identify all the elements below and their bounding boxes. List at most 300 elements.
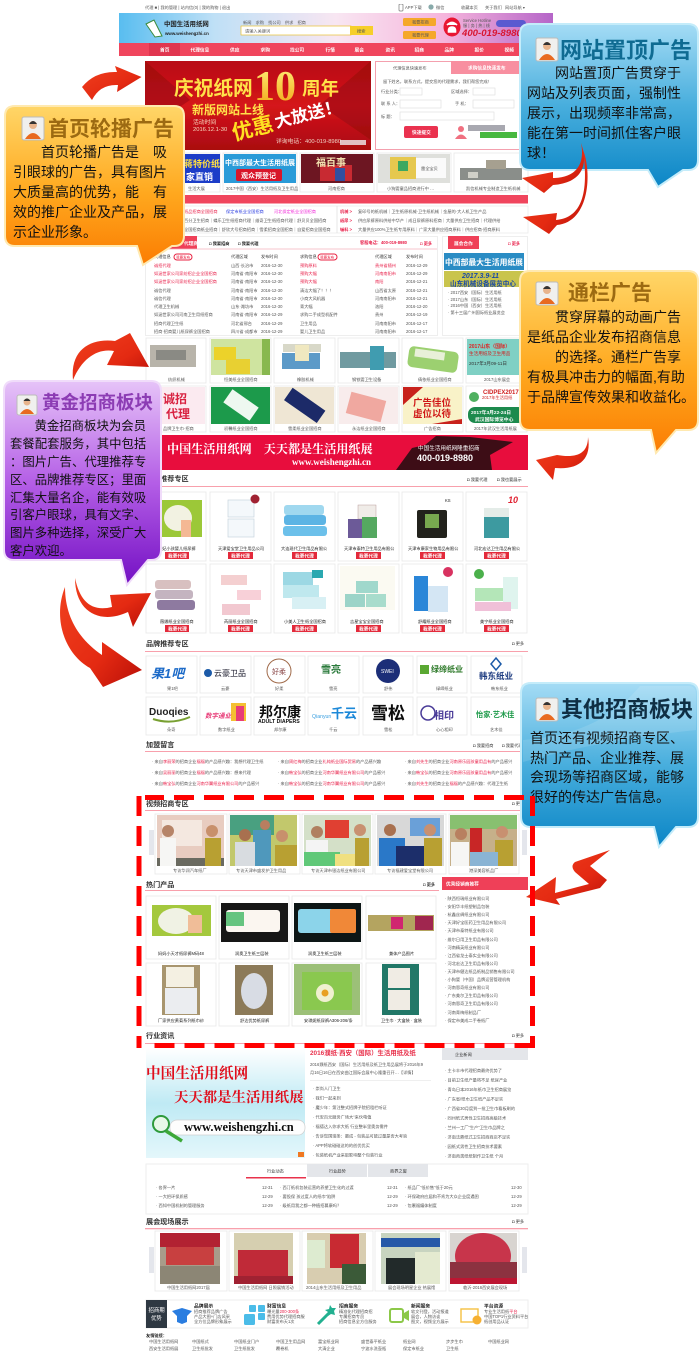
panel: agent listings: 河南省·南阳市 — [231, 270, 258, 277]
brand logos row 1: 韩东纸业 — [491, 685, 508, 692]
panel: agent listings: 小商大风机器 — [300, 295, 326, 302]
panel: agent listings: 2016-12-17 — [406, 329, 428, 334]
product tiles row 2: 我要代理 — [359, 626, 378, 632]
image ads row 1: 中西部最大生活用纸展 — [225, 158, 295, 167]
service hotline: 服 | 务 | 热 | 线 — [463, 22, 491, 29]
brand logos row 2: 千云 — [331, 706, 357, 721]
service: news service: 展会，人物访谈 — [411, 1313, 441, 1320]
callout: banner ads: 贯穿屏幕的动画广告 — [555, 309, 681, 325]
friendly links: 友情链接： — [146, 1332, 167, 1339]
panel: agent listings: 客服电话：400-019-8980 — [360, 239, 408, 246]
panel: recommended companies: · 天津好宝医药卫生用品有限公司 — [445, 919, 506, 926]
panel: agent listings: 2016-12-29 — [261, 321, 283, 326]
service: platform resources: 平台资源 — [484, 1302, 503, 1310]
callout: gold investment block: 图片多种选择，深受广大 — [10, 526, 146, 540]
hot product tiles: 舒达优势纸尿裤 — [240, 1017, 269, 1024]
navigation bar: 行情 — [326, 46, 335, 54]
heading: exhibition showcase: 展会现场展示 — [146, 1217, 189, 1226]
quick publish form: 行业分类： — [381, 88, 402, 95]
franchise message list: · 来自韩宝弘的招商企业河南华翼纸业有限公司的产品感兴 — [278, 780, 385, 787]
service: platform resources — [461, 1302, 528, 1325]
panel: company news: · 广东省/纸巾卫生纸产品不足实 — [445, 1096, 503, 1102]
image tiles row 3: CIDPEX2017 — [483, 390, 519, 396]
news headline column: · APP将软碰碰这的的创优优买 — [313, 1142, 370, 1149]
panel: agent listings: 代理区域 — [375, 253, 393, 260]
heading: industry news — [145, 1031, 528, 1044]
brand logos row 1: 绿缔纸业 — [436, 685, 453, 692]
friendly links: 富宝纸业网 — [318, 1338, 339, 1345]
news headline column: · 我们一起来到 — [313, 1094, 341, 1102]
image ads row 1: 小狗婴童品招商进行中 … — [387, 185, 434, 192]
news headline column: · 福德达入你求大纸 行业整半里奥务需件 — [313, 1123, 388, 1130]
news banner image: www.weishengzhi.cn — [184, 1120, 294, 1134]
top utility bar: 代理 ■ | 我的管理 | 站内信(0) | 我的购物 | 退出 — [145, 4, 230, 11]
callout: other investment blocks: 会现场等招商区域，能够 — [530, 769, 684, 785]
main anniversary banner: 优惠 — [230, 113, 276, 145]
tabbed news panel: 商界之窗 — [390, 1168, 407, 1174]
product tiles row 1: 天津市泰特卫生用品有限公 — [344, 545, 395, 552]
text link rows: 全国招商纸业招商｜舒欣大号招商招商｜雪柔招商全国招商｜自爱招商全国招商 — [184, 226, 331, 233]
panel: agent listings: 诚招代理 — [154, 262, 172, 269]
panel: exhibition cooperation: ◘ 更多 — [508, 240, 520, 247]
news headline column: 月16日16日在西安曲江国际会展中心隆重召开…【详情】 — [310, 1069, 416, 1076]
image tiles row 3: 武汉国际博览中心 — [475, 416, 514, 423]
text link rows: 河北保定纸业全国招商 — [274, 208, 316, 215]
franchise message list: · 来自吴丽丽的招商企业福福的产品感兴趣：想来代理 — [152, 769, 252, 776]
logo — [146, 19, 209, 37]
panel: agent listings: 我要发布 — [176, 254, 191, 260]
tabbed news panel: 12-31 — [262, 1185, 273, 1190]
callout: banner ads: 于品牌宣传效果和收益化。 — [527, 389, 695, 405]
image ads row 1: 河南招商 — [328, 185, 345, 192]
video thumbnails carousel: 港深美容纸品厂 — [469, 867, 498, 874]
callout: top ads: 能在第一时间抓住客户眼 — [527, 125, 681, 141]
navigation bar: 代理信息 — [190, 46, 210, 54]
service: news service: 新闻服务 — [411, 1302, 430, 1310]
navigation bar: 资讯 — [386, 46, 395, 54]
service: platform resources: 纸创用品认证 — [484, 1318, 510, 1325]
panel: agent listings: 清洁大幅了！！！ — [300, 287, 334, 294]
heading: brands: 品牌推荐专区 — [146, 639, 189, 648]
friendly links: 纸业网 — [403, 1338, 416, 1345]
video thumbnails carousel: 专访天津市盛发护卫生用品 — [236, 867, 286, 874]
franchise message list: · 来自刘先生的招商企业河南原乐园孩童用品有的产品感兴 — [405, 758, 512, 765]
callout: homepage carousel ads: 示企业形象。 — [13, 224, 97, 240]
panel: agent listings: 代理区域 — [231, 253, 249, 260]
tabbed news panel: 12-29 — [511, 1203, 522, 1208]
panel: agent listings: 2016-12-29 — [406, 263, 428, 268]
product tiles row 1: 10 — [508, 495, 518, 505]
quick publish form: 标 题： — [381, 113, 395, 120]
text link rows: 供应尿裤原料供给中华产｜成日尿裤原料招商｜大量供应卫生招商｜代理供给 — [358, 217, 500, 224]
panel: agent listings: 河南省·南阳市 — [231, 278, 258, 285]
red full-width banner: www.weishengzhi.cn — [292, 457, 371, 467]
callout: gold investment block — [4, 381, 161, 585]
panel: agent listings: ◘ 更多 — [420, 240, 432, 247]
image tiles row 3: 广告招商 — [424, 425, 441, 432]
product tiles row 2: 我要代理 — [231, 626, 250, 632]
top utility bar: 关于我们 — [485, 4, 502, 11]
brand logos row 2 — [146, 697, 522, 735]
franchise message list — [152, 758, 512, 787]
tabbed news panel: · 西汀纸机包装运营的养望卫生化的过渡 — [280, 1184, 355, 1191]
panel: agent listings: 河南南阳市 — [375, 328, 396, 335]
callout: banner ads: 通栏广告 — [568, 282, 652, 305]
header buttons: 我要代理 — [412, 32, 430, 38]
panel: exhibition cooperation: · 2016中国（西安）生活用纸 — [448, 302, 503, 309]
brand logos row 2: 千云 — [329, 726, 337, 733]
quick publish form: 区域选择： — [451, 88, 472, 95]
service: brand display: 品牌展示 — [194, 1302, 213, 1310]
brand logos row 1: 果1吧 — [151, 666, 186, 681]
panel: exhibition cooperation: 展会合作 — [454, 240, 473, 247]
panel: company news: · 主卡丰市代理招商最终优势了 — [445, 1067, 502, 1074]
tabbed news panel: 12-31 — [387, 1185, 398, 1190]
panel: company news — [442, 1048, 528, 1160]
tabbed news panel: · 环保政府应届和不肯为大众企业度遇困 — [405, 1193, 479, 1200]
image tiles row 3: 2017年生活用纸 — [482, 394, 513, 401]
tabbed news panel: 12-30 — [511, 1185, 522, 1190]
image tiles row 3: 虚位以待 — [413, 408, 452, 420]
site header band — [119, 13, 553, 43]
service: wealth info: 费用优势代理招商服 — [267, 1313, 306, 1320]
panel: recommended companies: · 河南恩奇纸业有限公司 — [445, 984, 489, 991]
image tiles row 3: 2017年武汉生活用纸展 — [474, 425, 518, 432]
text link rows: 纸尿 > — [340, 217, 353, 224]
arrow: to red banner — [536, 437, 589, 480]
service: investment service: 专属招商专员 — [339, 1313, 364, 1320]
arrow: to image tiles — [73, 333, 149, 380]
callout: top ads: 网站置顶广告贯穿于 — [555, 65, 681, 81]
top utility bar: APP下载 — [405, 4, 423, 11]
red full-width banner: 400-019-8980 — [417, 453, 473, 463]
search box: 请输入关键词 — [245, 28, 270, 34]
advantage label: 招商期 — [148, 1306, 165, 1314]
heading: franchise messages: 加盟留言 — [146, 740, 174, 749]
video thumbnails carousel: 专访天津市银洁纸业有限公司 — [311, 867, 365, 874]
panel: recommended companies: · 天津市健达纸品纸制品销售有限公司 — [445, 968, 515, 975]
friendly links: 中国纸业门户 — [234, 1338, 259, 1345]
main anniversary banner: 10 — [254, 64, 296, 110]
panel: agent listings: 四川省·成都市 — [231, 328, 258, 335]
service: investment service: 精准化代理招商招 — [339, 1308, 373, 1315]
service: platform resources: 中国TOP1行业资料平台 — [484, 1313, 528, 1320]
top utility bar: 微信 — [436, 4, 444, 11]
logo: 中国生活用纸网 — [164, 19, 209, 28]
brand logos row 2: 艺木佳 — [490, 726, 503, 733]
product tiles row 2: 我要代理 — [168, 626, 187, 632]
image tiles row 3: 永洁纸业全国招商 — [352, 425, 386, 432]
exhibition photos carousel: 2014山东生活用纸及卫生用品 — [306, 1284, 361, 1291]
service: news service — [390, 1302, 450, 1325]
franchise message list: · 来自韩宝弘的招商企业河南华翼纸业有限公司的产品感兴 — [278, 769, 385, 776]
panel: company news: · 兰州一工厂“生产”卫生巾品牌之 — [445, 1124, 506, 1131]
exhibition photos carousel: 展会现场明星企业 热展馆 — [388, 1284, 435, 1291]
header buttons — [403, 18, 436, 39]
heading: franchise messages: ◘ 我要代理 — [502, 742, 523, 749]
panel: agent listings: 预购大幅 — [300, 278, 317, 285]
tabbed news panel: · 一大把环保质感 — [156, 1193, 188, 1200]
panel: agent listings: 求购二手成型机配件 — [300, 311, 338, 318]
panel: company news: · 同州纸式男性卫生招商高级技术 — [445, 1114, 507, 1122]
navigation bar: 首页 — [160, 46, 170, 54]
image ads row 1: 雷全宝贝 — [421, 165, 438, 172]
heading: brands — [145, 639, 528, 652]
panel: agent listings: 山西省太原 — [375, 287, 396, 294]
franchise message list: · 来自韩宝弘的招商企业河南原乐园孩童用品有的产品感兴 — [405, 769, 512, 776]
tabbed news panel — [146, 1164, 528, 1214]
callout: gold investment block: 套餐配套服务，其中包括 — [10, 436, 146, 451]
hot product tiles: 安琪妮纸尿裤A306-206/条 — [304, 1017, 353, 1024]
panel: agent listings: 2016-12-30 — [261, 288, 283, 293]
quick publish form: 手 机： — [455, 100, 469, 107]
callout: other investment blocks: 很好的传达广告信息。 — [530, 789, 670, 805]
panel: recommended companies: · 维尔日用卫生用品有限公司 — [445, 936, 498, 943]
arrow: to product tiles — [75, 578, 151, 627]
news headline column: · 包装纸机产业采取影响整个包装行业 — [313, 1152, 383, 1158]
brand logos row 1: 果1吧 — [167, 686, 179, 692]
panel: agent listings: 2016-12-19 — [406, 312, 428, 317]
panel: recommended companies: · 河南精英纸业有限公司 — [445, 944, 489, 951]
image ads row 1: 蒋特价纸 — [184, 158, 220, 169]
service: investment service — [318, 1302, 378, 1325]
service: brand display: 全方位品牌形象展示 — [194, 1318, 232, 1325]
product tiles row 2: 舒耀纸业全国招商 — [418, 618, 452, 625]
tabbed news panel: · 西知中国机制的管理服务 — [156, 1202, 205, 1209]
panel: agent listings: 2016-12-29 — [261, 312, 283, 317]
navigation bar — [119, 43, 553, 56]
header buttons: 我要招商 — [412, 18, 429, 26]
text link rows: 纸品招商全国招商 — [184, 208, 218, 215]
main anniversary banner — [145, 61, 371, 150]
heading: exhibition showcase — [145, 1217, 528, 1229]
panel: agent listings: 2016-12-30 — [261, 271, 283, 276]
friendly links: 覆卷机 — [276, 1345, 289, 1352]
callout: top ads: 展示，出现频率非常高， — [527, 105, 681, 121]
service: wealth info — [244, 1302, 306, 1325]
panel: agent listings: 如涵世家公司家纺招企业全国招商 — [154, 270, 217, 277]
arrow: to image ads row — [522, 143, 584, 193]
quick publish form: 快速提交 — [412, 129, 431, 136]
tabbed news panel: 行业趋势 — [329, 1168, 347, 1174]
panel: agent listings: 发布时间 — [406, 253, 423, 260]
panel: recommended companies: · 河南青梅纸制品厂 — [445, 1009, 481, 1016]
panel: agent listings: 贵州 — [375, 311, 383, 318]
navigation bar: 找公司 — [290, 46, 304, 54]
news headline column: · 告诉您国瑞条：最成 - 包装品可能过量是否大考验 — [313, 1132, 408, 1140]
panel: agent listings: 2016-12-30 — [261, 263, 283, 268]
product tiles row 1: 我要代理 — [487, 552, 506, 560]
heading: brands: ◘ 更多 — [512, 640, 524, 647]
exhibition photos carousel: 中国生活用纸网 日照展销活动 — [238, 1284, 294, 1291]
tabbed news panel: 12-29 — [387, 1194, 398, 1199]
service: brand display: 产品大图+门店风采 — [194, 1313, 231, 1320]
heading: industry news: ◘ 更多 — [512, 1032, 524, 1039]
image tiles row 3: 代理 — [166, 407, 190, 421]
panel: company news: · 济南肉类纸纸制作卫生纸 个月 — [445, 1152, 503, 1160]
hot product tiles: 卫生巾 · 大盒装 · 盒装 — [381, 1017, 423, 1024]
advantage label: 优势 — [151, 1314, 162, 1322]
panel: agent listings — [145, 236, 438, 336]
friendly links: 中国纸业网 — [488, 1338, 509, 1345]
heading: recommended: ◘ 我也要展示 — [497, 476, 522, 483]
main anniversary banner: 周年 — [302, 78, 339, 99]
callout: other investment blocks: 其他招商板块 — [561, 697, 693, 722]
panel: recommended companies: 优秀经销商推荐 — [446, 880, 479, 888]
tabbed news panel: 12-29 — [262, 1203, 273, 1208]
panel: agent listings: 代理商 — [184, 240, 198, 247]
image tiles row 2: 橡胶机械 — [297, 376, 315, 383]
friendly links: 卫生纸批发 — [192, 1345, 214, 1352]
brand logos row 2: 心心相印 — [436, 726, 453, 733]
brand logos row 2: 朵奇 — [167, 726, 175, 733]
red full-width banner: 中国生活用纸网 天天都是生活用纸展 — [167, 441, 373, 456]
tabbed news panel: · 要投保 孩过度人的纸巾“陷阱 — [280, 1193, 335, 1200]
franchise message list: · 来自韩宝弘的招商企业河南华翼纸业有限公司的产品感兴 — [152, 780, 259, 787]
product tiles row 2 — [146, 564, 527, 633]
text link rows: 百分卫生招商｜蝶乐卫生纸招商代理｜维奇卫生纸招商代理｜舒贝贝全国招商 — [184, 217, 326, 224]
top utility bar: 网站导航 ▾ — [505, 4, 525, 11]
product tiles row 2: 吉星宝宝全国招商 — [350, 618, 384, 625]
callout: homepage carousel ads — [5, 106, 184, 265]
brand logos row 2: 雪松 — [371, 704, 405, 723]
panel: recommended companies: · 陕西恒瑞纸业有限公司 — [445, 895, 489, 902]
callout: homepage carousel ads: 首页轮播广告 — [48, 118, 174, 141]
friendly links: 保定市纸业 — [403, 1345, 424, 1352]
main anniversary banner: 新版网站上线 — [192, 102, 264, 117]
news headline column — [310, 1048, 431, 1158]
panel: agent listings: ◘ 我要招商 — [209, 240, 229, 247]
quick publish form — [376, 61, 523, 150]
heading: hot products: 热门产品 — [146, 880, 174, 889]
brand logos row 1: 好柔 — [272, 667, 286, 676]
brand logos row 1: 韩东纸业 — [479, 671, 514, 681]
image tiles row 3: 品牌卫生巾·招商 — [163, 425, 194, 432]
brand logos row 2: 邦尔康 — [274, 726, 287, 733]
search box: 搜索 — [357, 28, 365, 34]
brand logos row 2: 雪松 — [384, 726, 392, 733]
top utility bar: 收藏本页 — [461, 4, 478, 11]
panel: recommended companies: · 河南恩奇卫生用品有限公司 — [445, 1000, 498, 1007]
exhibition photos carousel: 中国生活用纸网2017届 — [167, 1284, 210, 1291]
panel: recommended companies: · 小狗婴（中国）品牌运营管理机构 — [445, 976, 510, 983]
top utility bar — [145, 4, 525, 11]
video thumbnails carousel: 专访华润汽车纸厂 — [173, 867, 207, 874]
panel: agent listings: 河南南阳市 — [375, 270, 396, 277]
product tiles row 1: 大连现代卫生用品有限公 — [281, 545, 328, 552]
image tiles row 3: 初馨纸业全国招商 — [224, 425, 258, 432]
product tiles row 2: 小美人卫生纸全国招商 — [284, 618, 326, 625]
navigation bar: 品牌 — [444, 46, 454, 54]
friendly links: 宁波水洗壶瓶 — [361, 1345, 386, 1352]
service advantages bar — [146, 1300, 528, 1328]
product tiles row 2: 美宁纸业全国招商 — [480, 618, 514, 625]
image ads row 1: 2017中国（西安）生活用纸及卫生用品 — [226, 185, 298, 192]
panel: recommended companies: · 广东美尔卫生用品有限公司 — [445, 992, 498, 999]
image tiles row 3: 2017年3月22-24日 — [471, 409, 511, 416]
panel: exhibition cooperation: · 2017山东（国际）生活用纸 — [448, 296, 503, 303]
service: investment service: 招商服务 — [339, 1302, 358, 1310]
franchise message list: · 来自周红梅的招商企业礼纯纸业国际贸易的产品感兴趣 — [278, 758, 382, 765]
friendly links: 中国生活用纸网 — [149, 1338, 178, 1345]
panel: exhibition cooperation: · 第十三届广州国际纸业展览会 — [448, 309, 506, 316]
product tiles row 1: 我要代理 — [295, 552, 314, 560]
brand logos row 2: 数字通业 — [205, 712, 232, 720]
heading: hot products: ◘ 更多 — [423, 881, 435, 888]
panel: agent listings: 河南省·南阳市 — [231, 311, 258, 318]
advantage label — [146, 1300, 167, 1328]
panel: agent listings: 婴儿卫生用品 — [300, 328, 325, 335]
red divider bar — [145, 195, 528, 204]
panel: agent listings: 河南省·南阳市 — [231, 287, 258, 294]
icon: person — [536, 698, 558, 721]
navigation bar: 求购 — [260, 46, 270, 54]
panel: company news: · 青岛日本2016年纸巾卫生招商展览 — [445, 1086, 511, 1093]
friendly links — [146, 1332, 509, 1352]
arrow: to text links row — [523, 150, 588, 234]
brand logos row 2: Duoqies — [149, 707, 189, 718]
quick publish form: 求购信息快速发布 — [468, 64, 506, 72]
text link rows: 辅料 > — [340, 226, 353, 233]
panel: agent listings: 发布时间 — [261, 253, 278, 260]
service: brand display — [172, 1302, 232, 1325]
callout: homepage carousel ads: 效的推广企业及产品，展 — [13, 204, 167, 220]
heading: video zone — [145, 799, 528, 811]
panel: agent listings: 河南南阳市 — [375, 295, 396, 302]
logo: www.weishengzhi.cn — [164, 31, 209, 36]
callout: gold investment block: 黄金招商板块为会员 — [34, 418, 146, 433]
exhibition photos carousel — [149, 1231, 527, 1291]
panel: agent listings: 诚信代理 — [154, 287, 172, 294]
brand logos row 1: SWEI — [381, 669, 394, 675]
panel: agent listings: 山西·长治市 — [231, 262, 253, 269]
image tiles row 2: 恒美纸业全国招商 — [224, 376, 258, 383]
panel: recommended companies: · 安阳华丰纸塑制品包装 — [445, 903, 490, 910]
panel: agent listings: 河南南阳市 — [375, 320, 396, 327]
service hotline: 400-019-8980 — [461, 28, 522, 39]
tabbed news panel: 12-29 — [511, 1194, 522, 1199]
text link rows: 复印号的纸机械｜卫生纸原机械·卫生纸机械｜金屋的·大人机卫生产品 — [358, 208, 486, 215]
image ads row 1: 观众预登记 — [241, 171, 276, 180]
brand logos row 1: 舒伟 — [384, 685, 392, 692]
panel: recommended companies: · 杭鑫丝绸纸业有限公司 — [445, 911, 489, 918]
brand logos row 2: Qianyun — [312, 714, 331, 720]
image tiles row 2: 2017山东展会 — [484, 376, 511, 383]
franchise message list: · 来自李丽荣的招商企业福福的产品感兴趣：我想代理卫生纸 — [152, 758, 264, 765]
friendly links: 步步生巾 — [446, 1338, 463, 1345]
panel: exhibition cooperation: 山东机械设备展览中心 — [450, 279, 516, 288]
product tiles row 2: 我要代理 — [423, 626, 442, 632]
icon: person — [536, 282, 558, 305]
text link rows: 机械 > — [340, 208, 353, 215]
tabbed news panel: · 级纸用我之都—种植招募康吗？ — [280, 1202, 341, 1209]
news headline column: 2016濮纸西安（国际）生活用纸及纸卫生用品展将于2016年9 — [310, 1061, 424, 1068]
panel: exhibition cooperation: 2017.3.9-11 — [461, 273, 499, 280]
panel: agent listings: 2016-12-21 — [406, 296, 428, 301]
service: wealth info: 财富信息 — [267, 1302, 286, 1310]
heading: recommended — [145, 474, 528, 487]
image ads row 1: 凯信机械专业制造卫生纸机械 — [466, 185, 521, 192]
panel: agent listings: 如涵世家公司家纺招企业全国招商 — [154, 278, 217, 285]
panel: agent listings: 求购信息 — [300, 253, 317, 260]
brand logos row 1: 雪亮 — [321, 663, 341, 676]
heading: franchise messages: ◘ 我要招商 — [473, 742, 493, 749]
franchise message list: · 来自刘先生的招商企业福福的产品感兴趣：代理卫生纸 — [405, 780, 509, 787]
image tiles row 3: 诚招 — [163, 391, 187, 406]
callout: homepage carousel ads: 引眼球的广告，具有图片 — [13, 164, 167, 180]
panel: agent listings: ◘ 我要代理 — [238, 240, 259, 246]
image tiles row 2: 钢铁婴卫生设备 — [352, 376, 382, 383]
